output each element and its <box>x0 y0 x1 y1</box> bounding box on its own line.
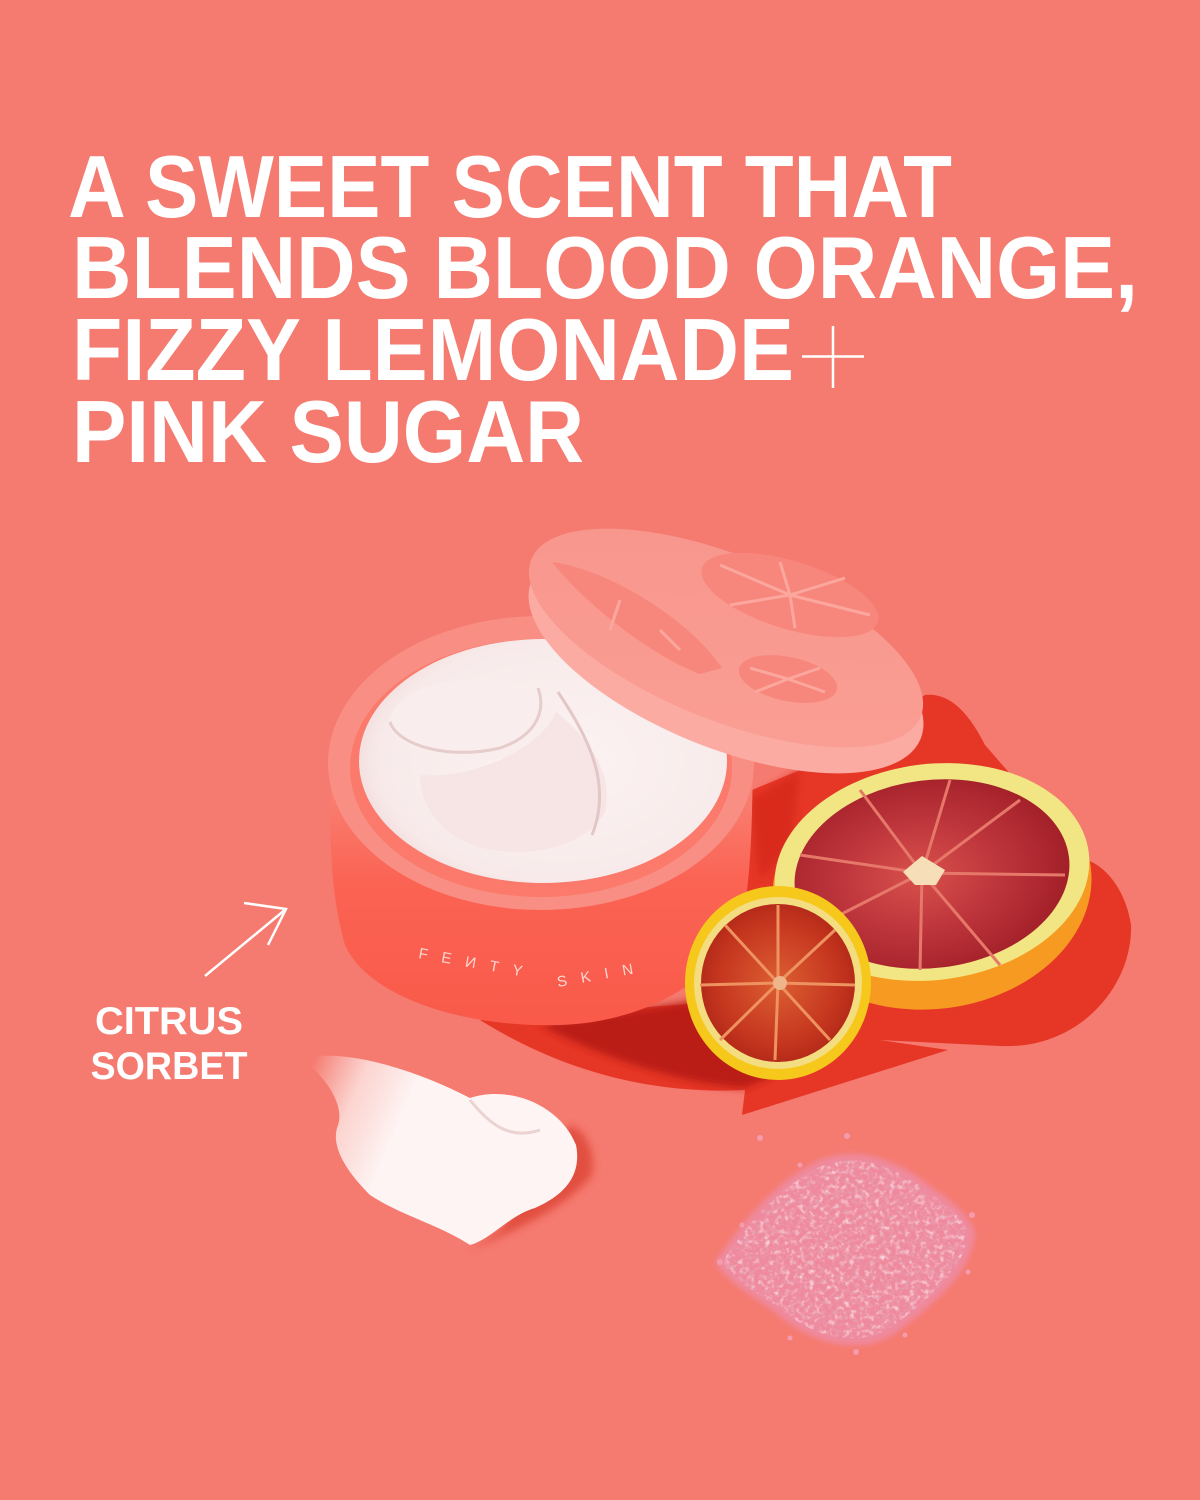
arrow <box>205 903 286 976</box>
lid orange slices <box>552 536 888 711</box>
title: A SWEET SCENT THAT <box>68 137 952 236</box>
jar rim <box>328 616 754 910</box>
label: citrus sorbet: SORBET <box>90 1045 248 1088</box>
plus sign <box>802 326 864 388</box>
cream swirl <box>390 679 558 760</box>
large blood orange <box>758 746 1106 1028</box>
jar <box>328 616 754 1025</box>
shadows <box>480 695 1131 1115</box>
cream <box>359 639 727 883</box>
jar: SKIN <box>556 958 648 991</box>
cream swatch <box>300 1056 593 1250</box>
title: FIZZY LEMONADE <box>72 300 794 399</box>
title <box>68 137 1138 481</box>
title: PINK SUGAR <box>72 382 584 481</box>
pink sugar pile <box>715 1133 975 1355</box>
lid <box>498 483 954 820</box>
jar body <box>330 765 753 1025</box>
title: BLENDS BLOOD ORANGE, <box>72 218 1138 317</box>
label: citrus sorbet: CITRUS <box>95 1000 243 1043</box>
small blood orange <box>685 886 871 1080</box>
brand text: FEИTY <box>417 945 538 983</box>
label: citrus sorbet <box>90 1000 248 1088</box>
